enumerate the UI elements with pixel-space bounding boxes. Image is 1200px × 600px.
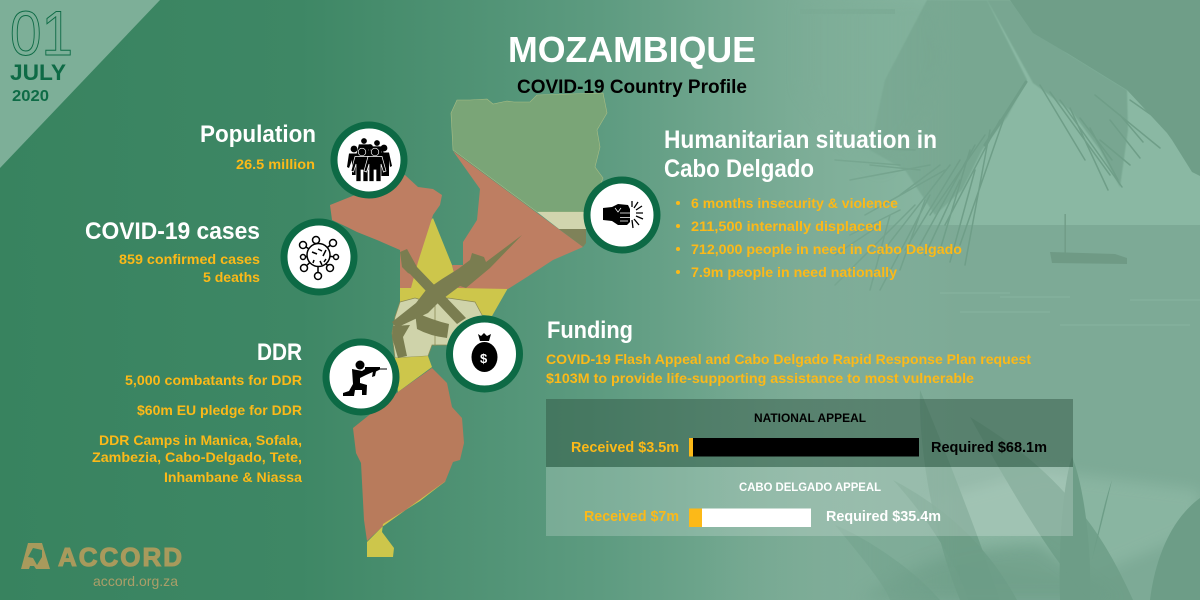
cases heading: COVID-19 cases xyxy=(85,218,260,245)
map: north-west orange region xyxy=(330,175,442,288)
humanitarian bullet list: 7.9m people in need nationally xyxy=(691,264,897,280)
logo mark xyxy=(21,543,50,569)
bar chart: Cabo Delgado appeal: CABO DELGADO APPEAL xyxy=(739,480,881,494)
logo wordmark: ACCORD xyxy=(58,542,182,572)
humanitarian heading: Cabo Delgado xyxy=(664,155,814,183)
panel: population xyxy=(200,121,404,195)
map: lower yellow region xyxy=(395,356,432,392)
DDR camps: Zambezia, Cabo-Delgado, Tete, xyxy=(92,449,302,465)
humanitarian bullet list xyxy=(676,195,962,280)
bar chart: national appeal: Required $68.1m xyxy=(931,439,1047,456)
funding description xyxy=(546,351,1031,386)
money bag dollar sign: $ xyxy=(480,351,488,366)
humanitarian bullet list: 712,000 people in need in Cabo Delgado xyxy=(691,241,962,257)
map: north-east band xyxy=(537,212,587,229)
date corner panel xyxy=(0,0,160,168)
icon: kneeling soldier xyxy=(326,342,396,412)
date month: JULY xyxy=(10,60,66,85)
icon: virus xyxy=(284,222,354,292)
confirmed cases: 859 confirmed cases xyxy=(119,251,260,267)
background: left palm frond xyxy=(835,0,1027,290)
website address: accord.org.za xyxy=(93,573,178,589)
bar chart: Cabo Delgado appeal: Received $7m xyxy=(584,508,679,525)
bar chart: Cabo Delgado appeal xyxy=(546,467,1073,536)
icon: money bag xyxy=(450,319,520,389)
background: bottom foreground plants xyxy=(876,390,1200,600)
background: right palm frond xyxy=(987,0,1180,190)
background: top left foliage texture xyxy=(879,9,895,14)
ACCORD logo xyxy=(21,542,182,589)
DDR camps xyxy=(92,432,302,485)
icon: fist impact xyxy=(587,180,657,250)
title: MOZAMBIQUE xyxy=(508,29,756,70)
DDR camps: Inhambane & Niassa xyxy=(164,469,302,485)
map: central yellow region xyxy=(400,218,508,316)
funding description: $103M to provide life-supporting assistance to most vulnerable xyxy=(546,370,974,386)
DDR heading: DDR xyxy=(257,339,302,366)
panel: humanitarian situation xyxy=(587,126,962,280)
map: northern region xyxy=(451,93,607,212)
map: southern yellow coast xyxy=(367,480,447,557)
map: southern orange region xyxy=(353,368,464,541)
DDR camps: DDR Camps in Manica, Sofala, xyxy=(99,432,302,448)
DDR pledge: $60m EU pledge for DDR xyxy=(137,402,302,418)
humanitarian bullet list: 6 months insecurity & violence xyxy=(691,195,898,211)
map of Mozambique xyxy=(330,93,607,557)
date year: 2020 xyxy=(12,88,49,105)
bar chart: Cabo Delgado appeal: Required $35.4m xyxy=(826,508,941,525)
background: sailing boat xyxy=(1050,214,1127,264)
background: top right palm crown xyxy=(1010,0,1200,176)
funding description: COVID-19 Flash Appeal and Cabo Delgado Rapid Response Plan request xyxy=(546,351,1031,367)
map: north-east orange region xyxy=(452,151,583,289)
funding heading: Funding xyxy=(547,317,633,344)
date day number: 01 xyxy=(10,0,73,69)
humanitarian bullet list: 211,500 internally displaced xyxy=(691,218,882,234)
bar chart: national appeal: Received $3.5m xyxy=(571,439,679,456)
map: crossed rifle and hoe emblem xyxy=(392,235,522,358)
population heading: Population xyxy=(200,121,316,148)
DDR combatants: 5,000 combatants for DDR xyxy=(125,372,302,388)
panel: COVID-19 cases xyxy=(85,218,354,292)
bar chart: national appeal xyxy=(546,399,1073,467)
panel: funding xyxy=(546,317,1073,536)
humanitarian heading: Humanitarian situation in xyxy=(664,126,937,154)
subtitle: COVID-19 Country Profile xyxy=(517,77,747,98)
map: central beige region xyxy=(392,298,490,358)
humanitarian heading xyxy=(664,126,937,183)
map: olive band xyxy=(559,229,586,247)
panel: DDR xyxy=(92,339,396,485)
background: beach photo with green tint xyxy=(320,0,1200,600)
icon: group of people xyxy=(334,125,404,195)
bar chart: national appeal: NATIONAL APPEAL xyxy=(754,411,866,425)
deaths: 5 deaths xyxy=(203,269,260,285)
population value: 26.5 million xyxy=(236,156,315,172)
